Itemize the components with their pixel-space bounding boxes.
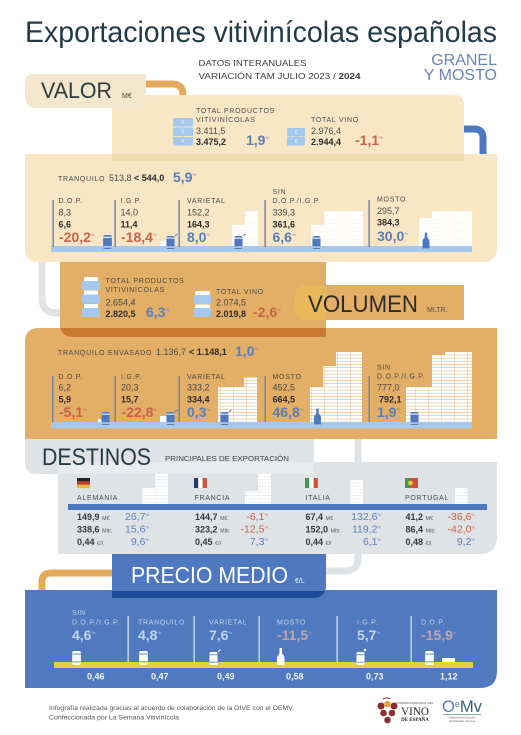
column: Alemania: 9,6 xyxy=(131,536,145,548)
column: D.O.P. volumen: -5,1 xyxy=(59,404,83,420)
column: I.G.P. volumen: 15,7 xyxy=(121,394,139,404)
column: sin D.O.P./I.G.P. valor: D.O.P./I.G.P. xyxy=(272,198,321,205)
column: Alemania: % xyxy=(145,512,149,517)
heading: volumen: MLTR. xyxy=(427,307,448,314)
icon: euro boxes total productos: € xyxy=(182,120,185,126)
heading: valor: VALOR xyxy=(41,78,112,103)
text: total productos volumen xyxy=(106,278,184,320)
text: total vino volumen xyxy=(216,289,281,320)
price values: 0,47 xyxy=(151,672,169,682)
column: I.G.P. valor: I.G.P. xyxy=(120,198,142,205)
column: D.O.P.: % xyxy=(453,630,457,635)
subtitle: datos interanuales xyxy=(198,58,361,81)
column: varietal volumen: 334,4 xyxy=(187,394,210,404)
column: Portugal: -42,0 xyxy=(448,524,471,536)
column: sin D.O.P./I.G.P. volumen: 777,0 xyxy=(377,382,400,392)
price values: 0,46 xyxy=(87,672,105,682)
blue rule xyxy=(68,504,487,510)
column: varietal volumen: VARIETAL xyxy=(187,374,226,381)
heading: valor: M€ xyxy=(122,93,132,100)
column: D.O.P. volumen: D.O.P. xyxy=(58,374,83,381)
column: tranquilo: 4,8 xyxy=(138,627,157,643)
icon: euro boxes total vino xyxy=(287,128,305,146)
text: tranquilo envasado line: 1,0 xyxy=(235,343,254,359)
column: sin D.O.P./I.G.P. volumen: D.O.P./I.G.P. xyxy=(377,374,425,380)
column: Portugal: % xyxy=(471,537,475,542)
column: Alemania: % xyxy=(145,524,149,530)
column: Italia: 119,2 xyxy=(352,524,377,536)
logo: vino de españa: INTERPROFESIONAL DEL xyxy=(397,701,434,705)
icon: cube stack total vino xyxy=(194,291,211,317)
column: mosto volumen: 452,5 xyxy=(272,382,295,392)
text: total productos valor: TOTAL PRODUCTOS xyxy=(196,108,275,115)
column: Alemania: 26,7 xyxy=(125,511,145,523)
price values xyxy=(87,672,458,682)
column: varietal valor: 8,0 xyxy=(187,229,206,245)
column: Italia: 152,0 Mltr. xyxy=(306,524,341,534)
column: D.O.P.: D.O.P. xyxy=(421,620,445,626)
column: D.O.P.: -15,9 xyxy=(421,627,453,643)
column: Alemania: ALEMANIA xyxy=(77,495,118,502)
column: mosto xyxy=(277,620,312,643)
logo: OEMV: del Mercado del Vino xyxy=(449,719,476,723)
column: Alemania: 338,6 Mltr. xyxy=(77,524,113,534)
connector: gray to volumen xyxy=(42,262,76,313)
column: Italia xyxy=(305,478,381,548)
column: sin D.O.P./I.G.P.: % xyxy=(91,630,95,635)
logo: vino de españa xyxy=(378,698,434,723)
text: total vino volumen: 2.019,8 xyxy=(216,309,246,319)
logo: vino de españa: DE ESPAÑA xyxy=(401,717,429,723)
column: mosto: % xyxy=(308,630,312,635)
text: total productos valor: 3.411,5 xyxy=(196,126,225,136)
column: Portugal: % xyxy=(471,512,475,517)
column: I.G.P. valor: 14,0 xyxy=(120,208,138,218)
column: sin D.O.P./I.G.P.: D.O.P./I.G.P. xyxy=(72,620,120,626)
column: mosto valor: MOSTO xyxy=(377,196,406,204)
column: Italia: % xyxy=(377,512,381,517)
column: mosto valor xyxy=(377,196,408,244)
column: sin D.O.P./I.G.P. volumen xyxy=(377,364,425,420)
logo: OEMV: O xyxy=(442,697,455,716)
connector: blue right xyxy=(464,129,483,154)
text: total vino valor: 2.976,4 xyxy=(311,126,341,136)
title: Exportaciones vitivinícolas españolas xyxy=(25,16,497,49)
text: total productos volumen: 2.820,5 xyxy=(106,309,136,319)
logo: OEMV: e xyxy=(455,699,460,709)
text: total vino volumen: TOTAL VINO xyxy=(216,289,264,296)
heading: granel y mosto: GRANEL xyxy=(431,52,497,69)
panel: destinos xyxy=(58,462,497,554)
heading: destinos: DESTINOS xyxy=(42,444,151,471)
column: sin D.O.P./I.G.P. valor: 6,6 xyxy=(272,229,292,245)
subtitle: datos interanuales: VARIACIÓN TAM JULIO 2023 / 2024 xyxy=(198,71,361,81)
column: Portugal: 41,2 M€ xyxy=(406,512,433,522)
text: total productos volumen: 6,3 xyxy=(146,304,165,320)
text: total productos volumen: VITIVINÍCOLAS xyxy=(106,285,165,294)
column: D.O.P. xyxy=(421,620,457,643)
column: Italia: 6,1 xyxy=(363,536,377,548)
column: sin D.O.P./I.G.P. valor: % xyxy=(292,232,296,237)
column: D.O.P. valor xyxy=(58,198,95,245)
column: tranquilo xyxy=(138,620,185,643)
column: mosto valor: 295,7 xyxy=(377,206,400,216)
column: varietal volumen: 333,2 xyxy=(187,382,210,392)
text: total vino valor: TOTAL VINO xyxy=(311,117,359,124)
column: Italia: % xyxy=(377,524,381,530)
column: varietal: % xyxy=(228,630,232,635)
column: mosto volumen: 664,5 xyxy=(272,394,295,404)
column: sin D.O.P./I.G.P.: SIN xyxy=(72,610,86,617)
footer credits: Infografía realizada gracias al acuerdo de colaboración de la OIVE con el OEMV. xyxy=(49,705,294,712)
panel: tranquilo valor xyxy=(25,154,497,262)
text: tranquilo envasado line: % xyxy=(254,346,258,351)
logo: OEMV: Mv xyxy=(460,697,482,716)
text: total vino volumen: -2,6 xyxy=(253,304,277,320)
heading: destinos xyxy=(25,439,314,474)
column: sin D.O.P./I.G.P. valor: 361,6 xyxy=(272,220,295,230)
column: Portugal: 9,2 xyxy=(457,536,471,548)
column: Alemania: 0,44 €/l xyxy=(77,537,103,547)
icon: euro boxes total vino: € xyxy=(295,139,298,145)
column: varietal: 7,6 xyxy=(209,627,228,643)
dividers xyxy=(52,200,370,247)
text: tranquilo line: 513,8 xyxy=(109,173,132,183)
column: Italia: ITALIA xyxy=(306,495,331,502)
text: tranquilo envasado line: 1.136,7 xyxy=(156,347,186,357)
column: varietal xyxy=(209,620,247,643)
heading: granel y mosto xyxy=(424,52,497,84)
column: tranquilo: % xyxy=(157,630,161,635)
text: total productos valor: % xyxy=(265,135,269,140)
column: I.G.P. volumen: % xyxy=(153,407,157,412)
column: varietal valor: % xyxy=(206,232,210,237)
icon: euro boxes total productos xyxy=(173,118,193,146)
column: Alemania xyxy=(77,478,149,548)
column: Portugal: -36,6 xyxy=(448,511,471,523)
column: varietal volumen: % xyxy=(206,407,210,412)
heading: volumen: VOLUMEN xyxy=(308,291,418,318)
column: D.O.P. volumen: % xyxy=(83,407,87,412)
column: sin D.O.P./I.G.P. valor: 339,3 xyxy=(272,208,295,218)
heading: precio medio xyxy=(112,554,326,598)
price values: 0,73 xyxy=(366,672,384,682)
text: total vino volumen: % xyxy=(277,307,281,312)
column: Francia: 7,3 xyxy=(250,536,264,548)
column: mosto valor: % xyxy=(404,231,408,236)
logo: OEMV: Observatorio Español xyxy=(449,716,476,720)
column: Portugal: 86,4 Mltr. xyxy=(406,524,436,534)
baseline bar xyxy=(51,422,472,428)
column: Alemania: 149,9 M€ xyxy=(77,512,110,522)
dividers xyxy=(52,376,370,422)
column: Francia: 323,2 Mltr. xyxy=(195,524,231,534)
column: I.G.P. valor: 11,4 xyxy=(120,220,138,230)
panel: tranquilo envasado xyxy=(25,328,497,439)
column: Portugal: 0,48 €/l xyxy=(406,537,431,547)
column: varietal valor: 152,2 xyxy=(187,208,210,218)
baseline bar xyxy=(51,246,472,252)
heading: precio medio: PRECIO MEDIO xyxy=(131,562,288,588)
column: mosto volumen: 46,8 xyxy=(272,404,300,420)
column: Italia: 67,4 M€ xyxy=(306,512,333,522)
chart: block stacks valor xyxy=(160,211,472,246)
column: I.G.P. volumen: -22,8 xyxy=(122,404,153,420)
column: mosto: MOSTO xyxy=(277,620,306,626)
icons: jars and bottle precio xyxy=(72,648,434,665)
column: Francia: % xyxy=(264,524,268,530)
text: total productos volumen: TOTAL PRODUCTOS xyxy=(106,278,184,285)
heading: precio medio: €/L xyxy=(295,578,305,585)
column: Portugal xyxy=(405,478,475,548)
heading: valor xyxy=(25,74,146,108)
column: Francia: 144,7 M€ xyxy=(195,512,228,522)
text: total productos valor: VITIVINÍCOLAS xyxy=(196,115,256,124)
column: Francia: -12,5 xyxy=(240,524,264,536)
text: tranquilo line xyxy=(58,169,196,185)
column: I.G.P. xyxy=(357,620,380,643)
column: varietal: VARIETAL xyxy=(209,620,247,626)
column: mosto valor: 30,0 xyxy=(377,228,404,244)
heading: destinos: PRINCIPALES DE EXPORTACIÓN xyxy=(165,454,289,463)
column: I.G.P. volumen: 20,3 xyxy=(121,382,139,392)
panel: volumen totals xyxy=(60,262,326,337)
panel: precio medio xyxy=(25,590,497,688)
text: total productos valor: 3.475,2 xyxy=(196,137,226,147)
text: tranquilo envasado line: < 1.148,1 xyxy=(189,347,227,357)
column: sin D.O.P./I.G.P. valor: SIN xyxy=(272,189,286,196)
icons: jars and bottle volumen xyxy=(101,409,419,425)
logo: OEMV xyxy=(442,697,482,723)
text: tranquilo line: < 544,0 xyxy=(134,173,164,183)
column: Italia: % xyxy=(377,537,381,542)
column: sin D.O.P./I.G.P. volumen: SIN xyxy=(377,364,391,372)
column: Portugal: % xyxy=(471,524,475,530)
footer credits xyxy=(49,705,294,722)
column: I.G.P.: 5,7 xyxy=(357,627,376,643)
column: I.G.P. valor: % xyxy=(153,232,157,237)
column: Francia xyxy=(194,478,268,548)
text: tranquilo envasado line xyxy=(58,343,258,359)
column: mosto volumen: MOSTO xyxy=(272,374,302,381)
white block xyxy=(442,658,455,662)
text: total vino valor: -1,1 xyxy=(355,132,379,148)
column: varietal volumen xyxy=(187,374,226,420)
text: tranquilo line: TRANQUILO xyxy=(58,176,105,183)
column: I.G.P.: % xyxy=(376,630,380,635)
text: total vino valor xyxy=(311,117,383,148)
text: total productos valor: 1,9 xyxy=(246,132,265,148)
column: D.O.P. volumen xyxy=(58,374,87,420)
price bar xyxy=(54,662,473,668)
column: sin D.O.P./I.G.P. valor xyxy=(272,189,321,245)
column: I.G.P. volumen xyxy=(121,374,157,420)
column: Alemania: % xyxy=(145,537,149,542)
column: Italia: 0,44 €/l xyxy=(306,537,331,547)
dividers xyxy=(128,616,412,662)
price values: 1,12 xyxy=(440,672,458,682)
column: D.O.P. valor: % xyxy=(91,232,95,237)
column: D.O.P. valor: -20,2 xyxy=(59,229,91,245)
column: I.G.P.: I.G.P. xyxy=(357,620,378,626)
column: Francia: 0,45 €/l xyxy=(195,537,221,547)
column: D.O.P. volumen: 5,9 xyxy=(58,394,71,404)
logo: vino de españa: VINO xyxy=(401,704,429,718)
chart: destination stacks xyxy=(142,470,468,504)
text: total productos volumen: % xyxy=(165,307,169,312)
heading: volumen xyxy=(295,285,464,320)
column: Francia: % xyxy=(264,537,268,542)
column: sin D.O.P./I.G.P.: 4,6 xyxy=(72,627,91,643)
text: tranquilo line: % xyxy=(192,172,196,177)
column: varietal volumen: 0,3 xyxy=(187,404,206,420)
column: I.G.P. volumen: I.G.P. xyxy=(121,374,142,381)
column: varietal valor xyxy=(187,198,226,245)
column: D.O.P. valor: 8,3 xyxy=(58,208,71,218)
column: mosto valor: 384,3 xyxy=(377,218,400,228)
column: D.O.P. valor: 6,6 xyxy=(58,220,71,230)
text: total productos valor xyxy=(196,108,275,148)
column: sin D.O.P./I.G.P. xyxy=(72,610,120,643)
icons: jars and bottle valor xyxy=(103,233,430,249)
column: Francia: -6,1 xyxy=(246,511,264,523)
text: total productos volumen: 2.654,4 xyxy=(106,298,136,308)
icon: euro boxes total vino: € xyxy=(295,130,298,136)
chart: block stacks volumen xyxy=(218,352,472,422)
column: D.O.P. volumen: 6,2 xyxy=(58,382,71,392)
text: total vino valor: 2.944,4 xyxy=(311,137,341,147)
icon: euro boxes total productos: € xyxy=(182,130,185,136)
icon: cube stack total productos xyxy=(82,277,100,317)
column: Portugal: PORTUGAL xyxy=(405,495,449,502)
text: total vino valor: % xyxy=(379,135,383,140)
column: mosto volumen xyxy=(272,374,304,420)
text: tranquilo line: 5,9 xyxy=(173,169,192,185)
column: I.G.P. valor xyxy=(120,198,157,245)
column: sin D.O.P./I.G.P. volumen: 1,9 xyxy=(377,404,396,420)
column: mosto: -11,5 xyxy=(277,627,308,643)
column: varietal valor: 164,3 xyxy=(187,220,210,230)
column: mosto volumen: % xyxy=(300,407,304,412)
column: tranquilo: TRANQUILO xyxy=(138,620,185,626)
column: varietal valor: VARIETAL xyxy=(187,198,226,205)
heading: granel y mosto: Y MOSTO xyxy=(424,67,497,84)
column: Francia: FRANCIA xyxy=(194,495,230,502)
column: sin D.O.P./I.G.P. volumen: % xyxy=(396,407,400,412)
panel: valor totals xyxy=(112,95,464,161)
column: Francia: % xyxy=(264,512,268,517)
column: Italia: 132,6 xyxy=(351,511,377,523)
subtitle: datos interanuales: DATOS INTERANUALES xyxy=(198,58,307,68)
column: Alemania: 15,6 xyxy=(125,524,145,536)
footer credits: Confeccionada por La Semana Vitivinícola xyxy=(49,714,179,722)
price values: 0,58 xyxy=(286,672,304,682)
icon: euro boxes total productos: € xyxy=(182,139,185,145)
column: I.G.P. valor: -18,4 xyxy=(121,229,153,245)
price values: 0,49 xyxy=(217,672,235,682)
column: D.O.P. valor: D.O.P. xyxy=(58,198,83,205)
text: tranquilo envasado line: TRANQUILO ENVASADO xyxy=(58,350,152,357)
connector: gray to precio xyxy=(326,439,358,571)
connector: orange to precio xyxy=(42,573,112,592)
column: sin D.O.P./I.G.P. volumen: 792,1 xyxy=(379,394,402,404)
small white blocks xyxy=(98,416,168,422)
text: total vino volumen: 2.074,5 xyxy=(216,298,246,308)
connector: valor to total xyxy=(146,84,183,114)
